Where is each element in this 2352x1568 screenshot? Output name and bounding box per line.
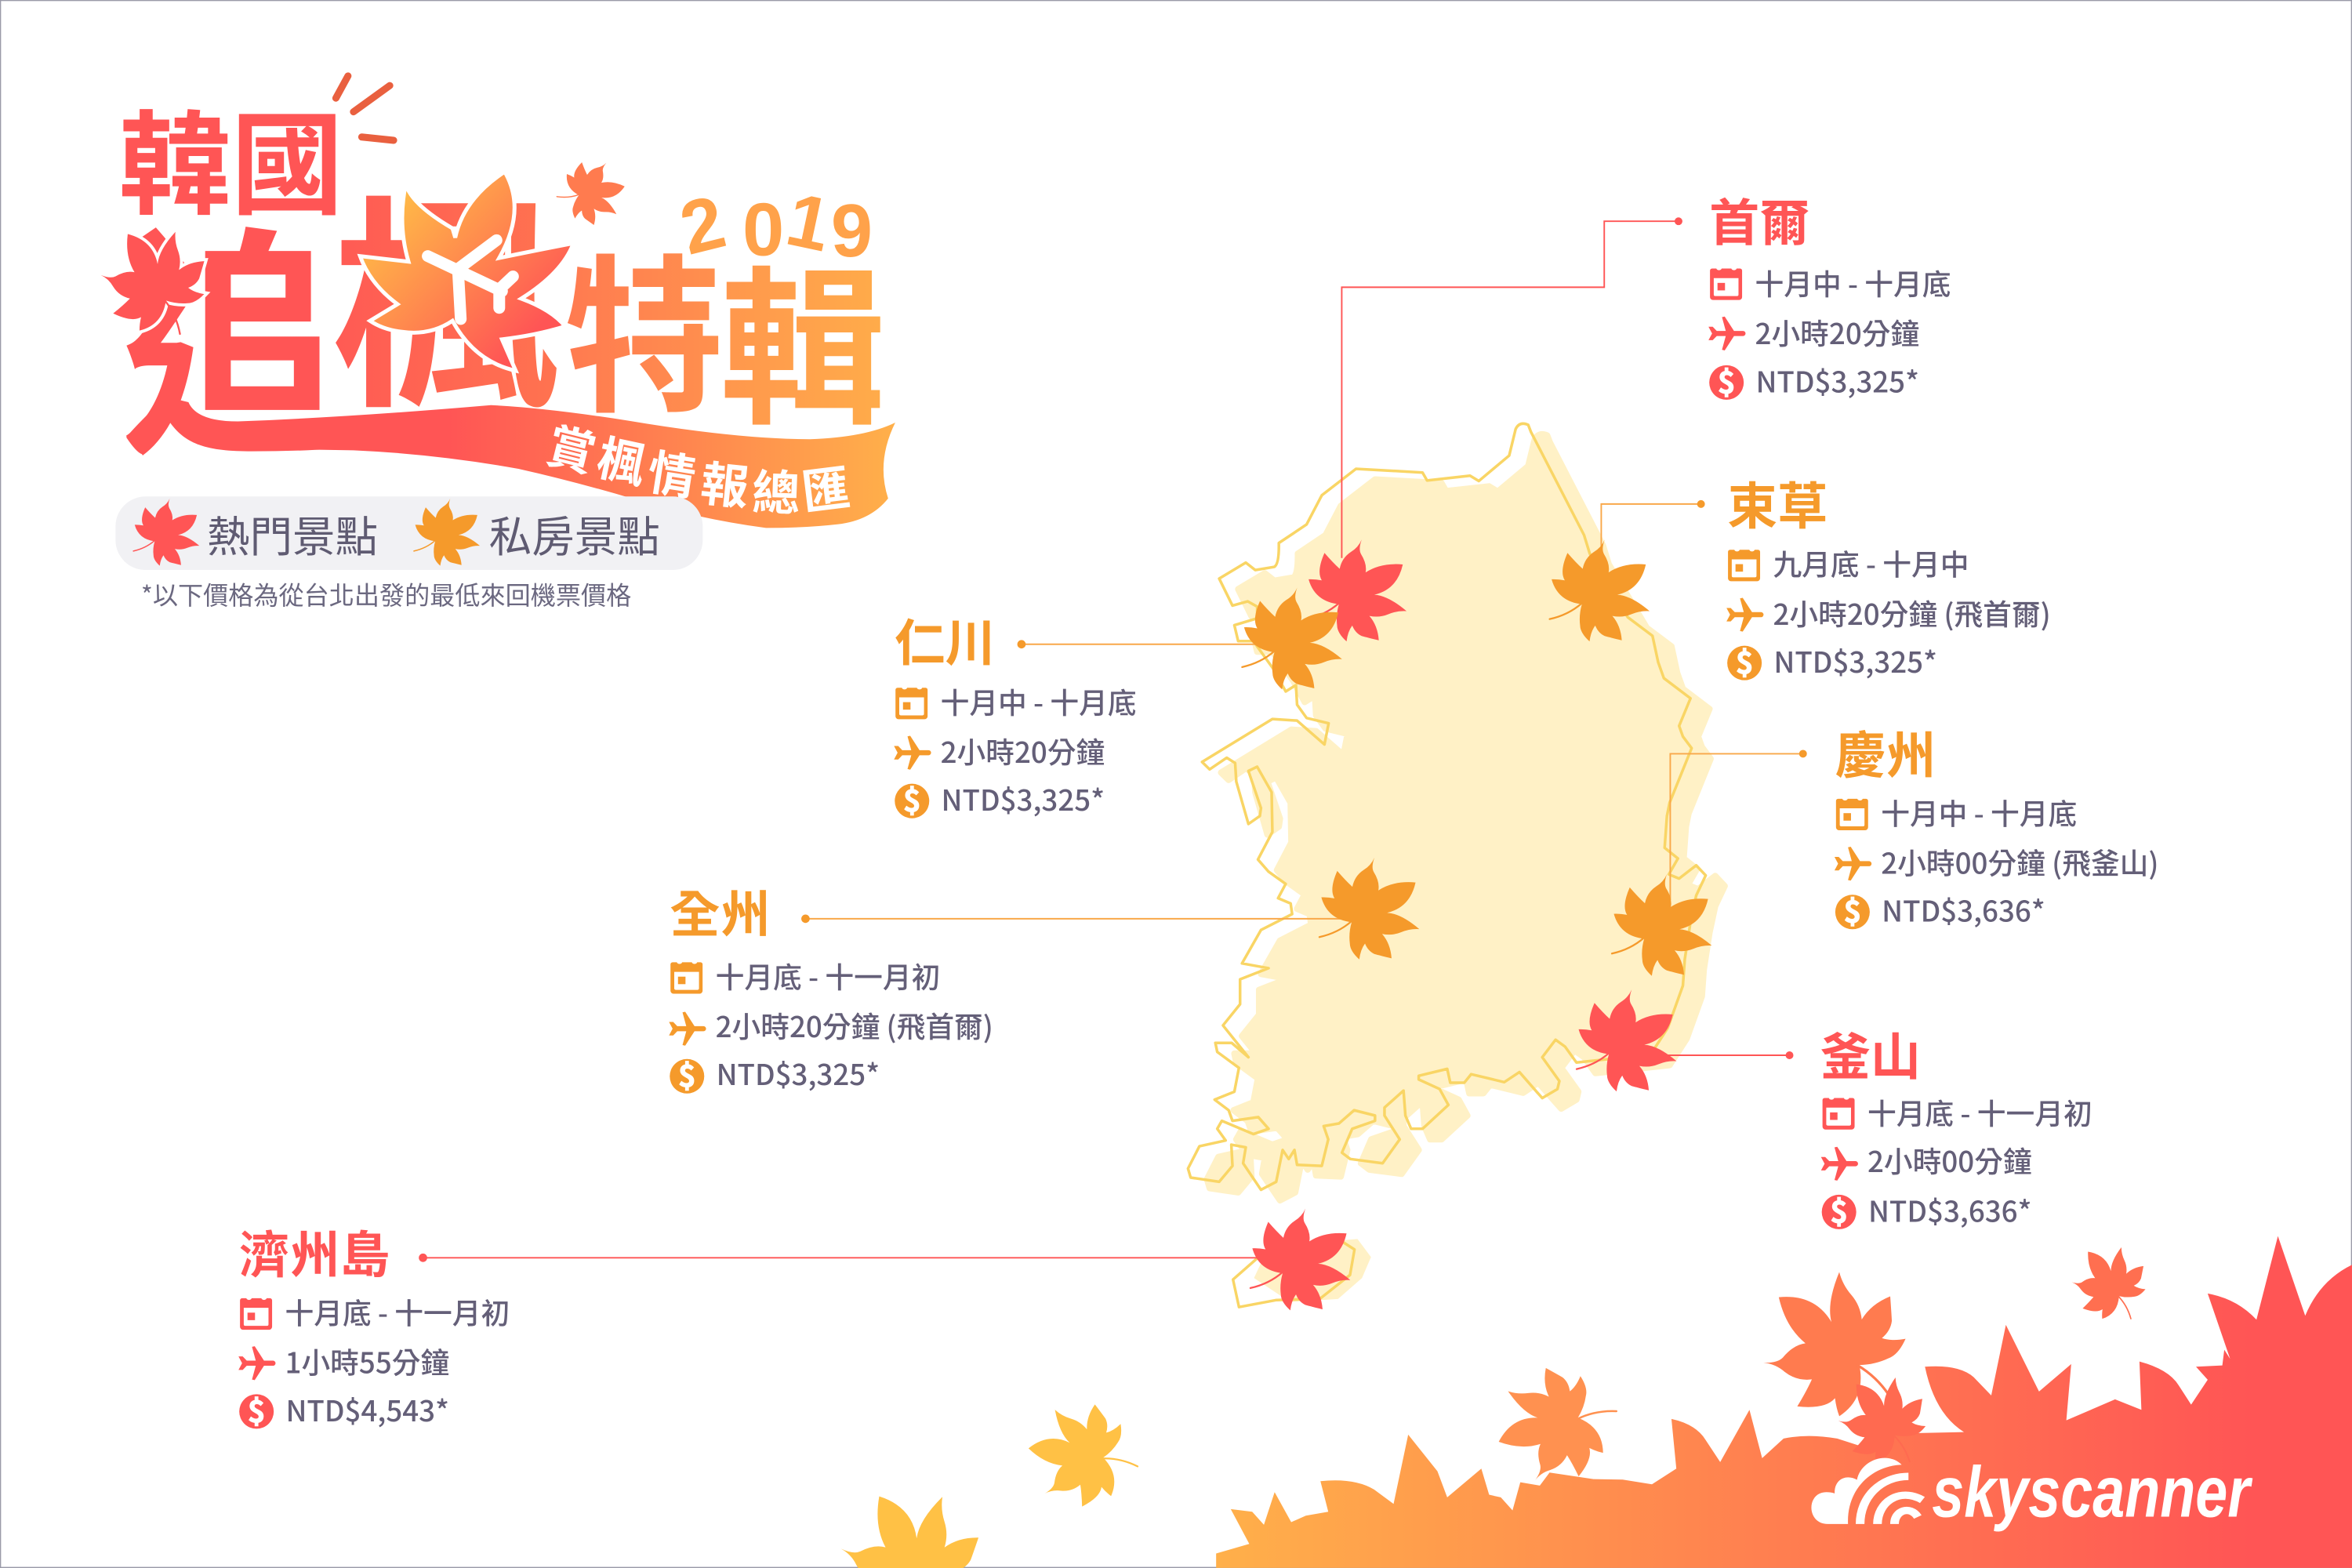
city: 首爾: 首爾 (1709, 183, 1809, 256)
title glyph: 追: 追 (122, 152, 340, 503)
leaf: large orange (1744, 1259, 1923, 1436)
title glyph: 楓: 楓 (332, 127, 560, 452)
ribbon text: 匯 (797, 448, 854, 524)
map leaf: Gyeongju (1612, 874, 1711, 976)
city: 首爾: 十月中 - 十月底 (1755, 261, 1951, 303)
yellow leaf bottom edge (834, 1488, 983, 1568)
city: 仁川: $ (903, 778, 921, 821)
leaf: small red-orange (1835, 1375, 1929, 1468)
year 2019: 9 (831, 189, 873, 273)
logo cloud icon (1811, 1458, 1922, 1524)
city: 慶州 (1835, 716, 2158, 932)
logo wordmark: skyscanner (1932, 1452, 2252, 1532)
city: 首爾: $ (1718, 359, 1735, 402)
map fill (1207, 434, 1725, 1200)
leaf: top right (2070, 1246, 2147, 1322)
city: 濟州島: 濟州島 (239, 1215, 390, 1287)
city: 慶州: $ (1844, 889, 1861, 932)
city: 仁川: 2小時20分鐘 (941, 729, 1105, 771)
city: 釜山 (1820, 1018, 2092, 1232)
city: 慶州: 十月中 - 十月底 (1881, 790, 2077, 833)
city: 束草: 九月底 - 十月中 (1773, 542, 1969, 584)
city: 束草: $ (1736, 640, 1753, 683)
small leaf top (552, 151, 633, 232)
year 2019: 0 (742, 187, 784, 271)
connector lines (419, 217, 1807, 1262)
ribbon text: 賞 (540, 407, 604, 486)
foreground leaf silhouettes (1216, 1236, 2352, 1568)
year 2019: 2 (672, 180, 733, 271)
city: 釜山: 2小時00分鐘 (1867, 1138, 2032, 1181)
city: 釜山: 十月底 - 十一月初 (1867, 1091, 2092, 1133)
leaf: mid orange (1488, 1359, 1623, 1496)
city: 慶州: NTD$3,636* (1882, 888, 2045, 931)
city: 全州 (669, 875, 993, 1096)
ribbon text: 楓 (592, 419, 653, 497)
sparkle strokes (336, 76, 394, 140)
city: 全州: NTD$3,325* (717, 1051, 880, 1094)
city: 全州: 十月底 - 十一月初 (716, 954, 940, 996)
city: 仁川: NTD$3,325* (942, 777, 1105, 819)
map leaf: Jeonju (1319, 858, 1419, 960)
map of Korea (1188, 423, 1725, 1200)
city: 釜山: $ (1830, 1189, 1848, 1232)
ribbon banner (126, 395, 895, 528)
city: 釜山: NTD$3,636* (1868, 1188, 2031, 1230)
city: 仁川 (894, 604, 1137, 821)
legend label: private spots: 私房景點 (489, 503, 660, 564)
year 2019 (672, 177, 873, 273)
map leaf: Busan (1577, 989, 1676, 1091)
city: 濟州島: 十月底 - 十一月初 (285, 1290, 510, 1332)
map leaf: Seoul (1307, 539, 1406, 641)
city: 仁川: 仁川 (895, 604, 995, 676)
city: 束草: 2小時20分鐘 (飛首爾) (1773, 591, 2051, 633)
ribbon text (540, 407, 854, 525)
city: 束草: 束草 (1727, 467, 1828, 539)
big maple leaf with plane (360, 172, 573, 371)
city: 慶州: 2小時00分鐘 (飛釜山) (1881, 840, 2158, 882)
legend icon: hot spot leaf (133, 499, 199, 566)
Jeju island (1233, 1239, 1371, 1307)
city: 首爾: 2小時20分鐘 (1755, 310, 1919, 353)
city: 束草 (1726, 467, 2051, 683)
title glyph: 特: 特 (564, 201, 724, 447)
ribbon text: 情 (643, 434, 702, 510)
map leaf: Jeju (1250, 1209, 1350, 1310)
map leaf: Incheon (1242, 587, 1342, 689)
ribbon text: 總 (751, 453, 801, 525)
city: 全州: 全州 (670, 875, 770, 947)
Skyscanner logo (1811, 1452, 2252, 1532)
city: 全州: 2小時20分鐘 (飛首爾) (716, 1004, 993, 1046)
city: 慶州: 慶州 (1835, 716, 1936, 788)
city: 首爾 (1708, 183, 1951, 402)
city: 濟州島 (238, 1215, 510, 1432)
legend label: hot spots: 熱門景點 (207, 503, 378, 564)
year 2019: 1 (779, 177, 838, 268)
legend icon: private spot leaf (414, 499, 480, 566)
city: 濟州島: NTD$4,543* (285, 1388, 449, 1430)
city: 釜山: 釜山 (1820, 1018, 1921, 1090)
title block (99, 75, 895, 528)
map leaf: Sokcho (1550, 539, 1650, 641)
ribbon text: 報 (698, 445, 753, 519)
city: 濟州島: 1小時55分鐘 (285, 1340, 449, 1382)
footnote: *以下價格為從台北出發的最低來回機票價格 (141, 576, 631, 612)
red leaf left of title (99, 229, 206, 335)
map outline (1188, 423, 1706, 1190)
city: 首爾: NTD$3,325* (1755, 358, 1919, 401)
city: 全州: $ (678, 1053, 696, 1096)
legend pill (115, 496, 702, 570)
city: 濟州島: $ (248, 1388, 265, 1432)
title: 韓國: 韓國 (118, 75, 343, 238)
city: 束草: NTD$3,325* (1773, 639, 1937, 681)
yellow falling leaf (1010, 1386, 1152, 1528)
city: 仁川: 十月中 - 十月底 (941, 680, 1137, 722)
title glyph: 輯: 輯 (720, 214, 885, 459)
